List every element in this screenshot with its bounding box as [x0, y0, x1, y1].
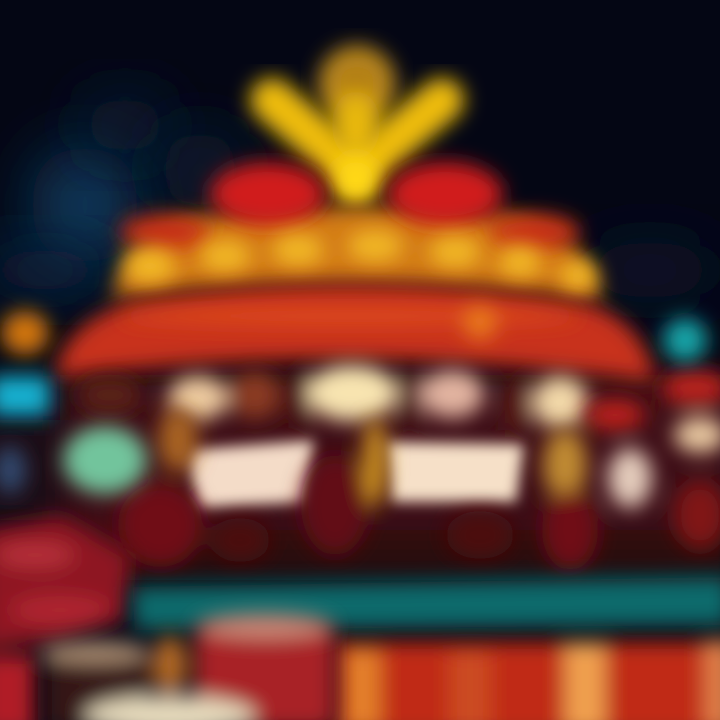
crown ring [329, 56, 385, 112]
sign: upper orange dome [112, 206, 602, 300]
orange lamp [1, 311, 49, 355]
lower white panels [186, 440, 524, 508]
sign: glowing letters [124, 230, 596, 292]
foreground red chips [40, 614, 335, 720]
teal lamp [663, 318, 707, 362]
sign: red domes [120, 162, 580, 250]
green window [63, 426, 147, 494]
teal counter band [132, 577, 720, 630]
bottom orange wall [335, 640, 720, 720]
canopy highlights [120, 304, 580, 340]
side lights [0, 311, 707, 494]
left red stack [0, 515, 130, 720]
sign: red canopy band [55, 284, 655, 382]
blue-grey window [0, 446, 26, 494]
upper windows [78, 365, 588, 430]
lower building backdrop [0, 375, 720, 580]
sign: crown emblem [272, 56, 442, 206]
crown arms [272, 100, 442, 172]
centre pillars and figures [118, 370, 720, 570]
crown centre [332, 91, 380, 159]
cyan sign [0, 376, 50, 416]
